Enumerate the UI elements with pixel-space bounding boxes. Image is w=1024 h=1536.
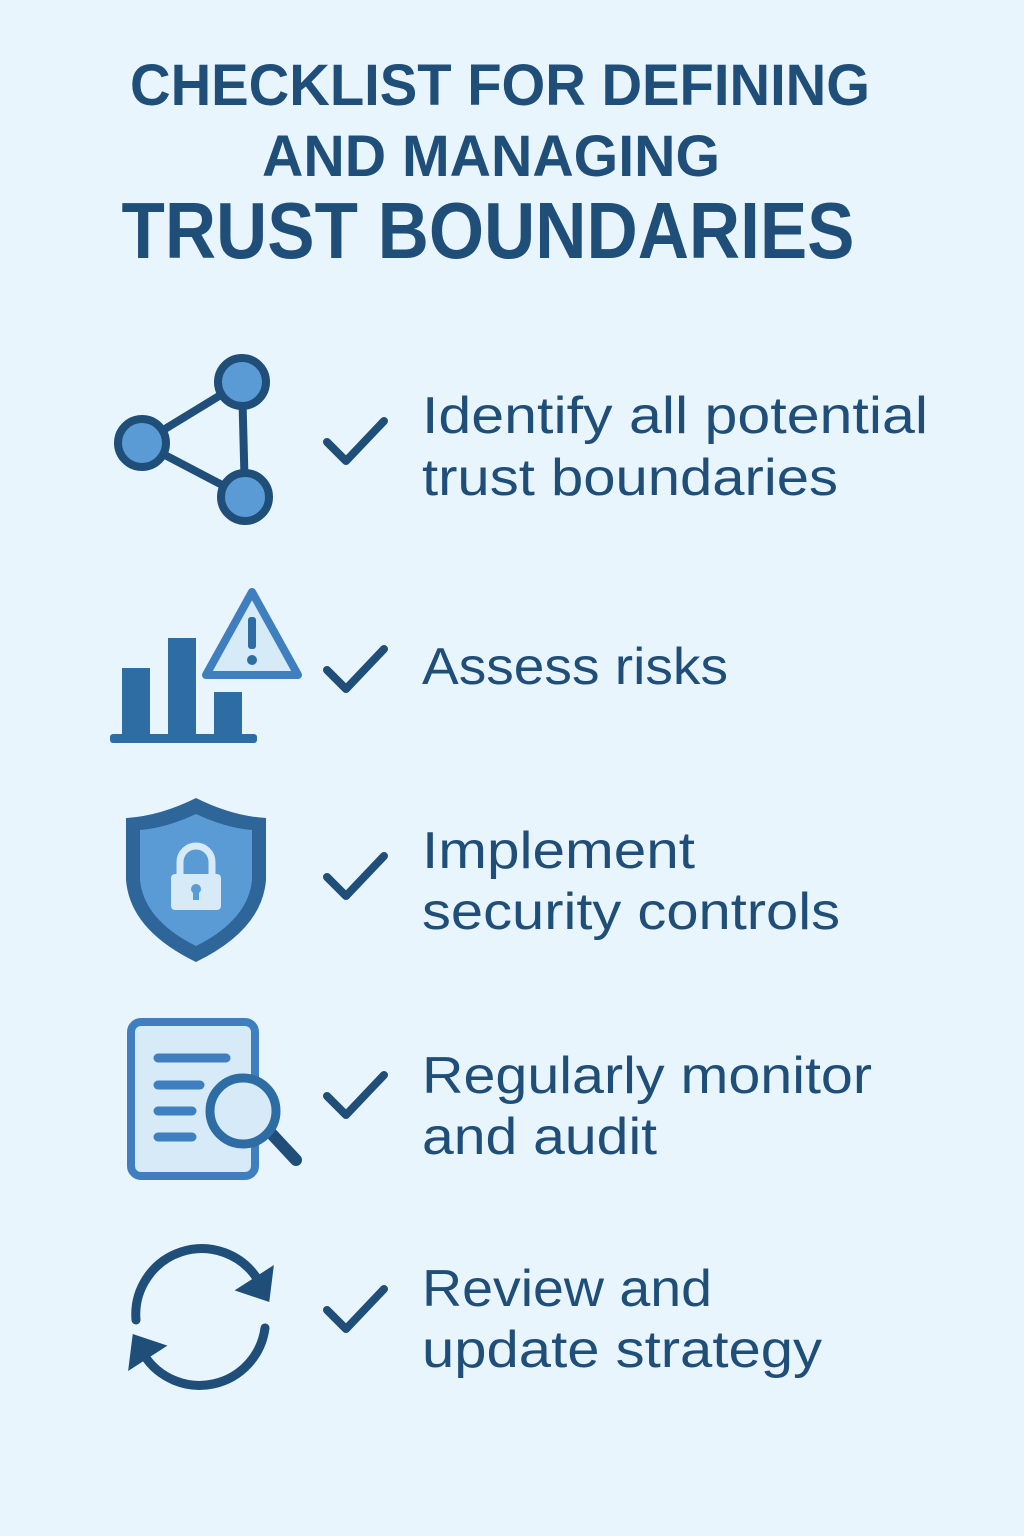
checklist text: update strategy	[422, 1321, 822, 1379]
icon: network nodes	[118, 358, 269, 521]
checkmarks	[327, 421, 384, 1329]
icon: bar chart with warning	[110, 592, 298, 743]
title: CHECKLIST FOR DEFINING	[130, 53, 870, 118]
title: AND MANAGING	[262, 124, 720, 189]
title: TRUST BOUNDARIES	[122, 186, 854, 275]
checklist text: Assess risks	[422, 638, 728, 696]
checklist text: Regularly monitor	[422, 1047, 872, 1105]
checklist text	[422, 387, 928, 1379]
checklist text: and audit	[422, 1108, 658, 1166]
checklist text: Identify all potential	[422, 387, 928, 445]
icon: refresh arrows	[130, 1249, 272, 1385]
checklist text: trust boundaries	[422, 449, 838, 507]
icon: document with magnifier	[131, 1022, 296, 1176]
title	[122, 53, 870, 275]
checklist text: Review and	[422, 1260, 712, 1318]
checklist text: Implement	[422, 822, 696, 880]
icon: shield with lock	[126, 798, 266, 962]
checklist text: security controls	[422, 883, 840, 941]
